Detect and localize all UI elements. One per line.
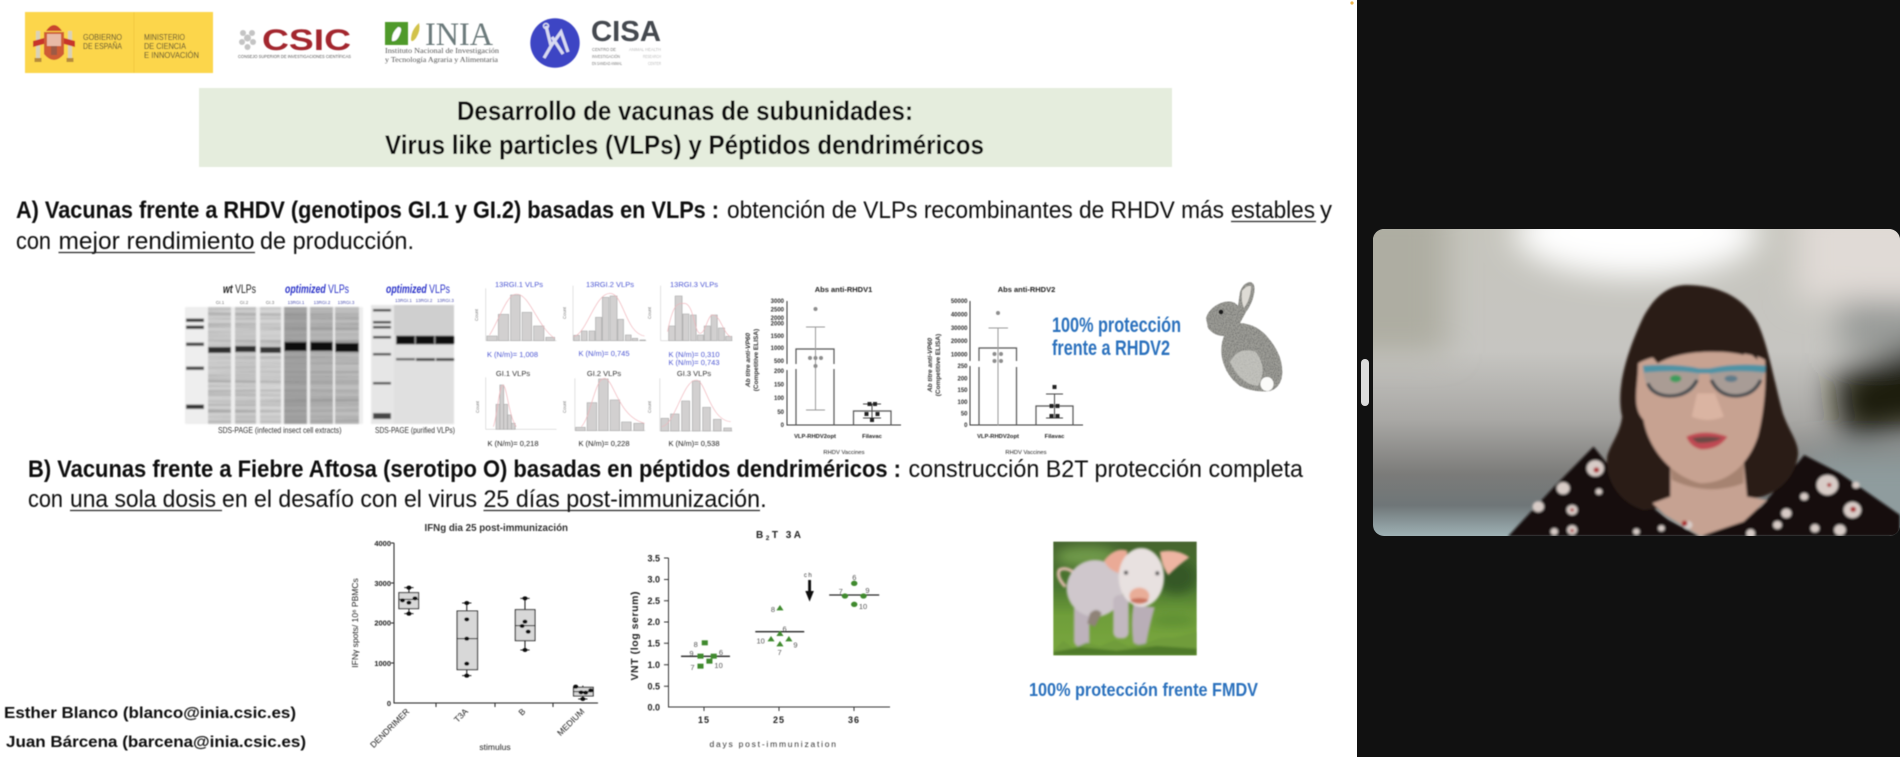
chart: B2T 3A VNT: 6 [783, 624, 787, 634]
chart: B2T 3A VNT: 2.5 [647, 596, 660, 606]
blurred room background [1373, 229, 1900, 536]
chart: B2T 3A VNT: T 3A [772, 530, 801, 541]
figure: SDS-PAGE gels [185, 282, 455, 435]
histogram titles and stiffness values: K (N/m)= 0,538 [668, 439, 720, 448]
figure: SDS-PAGE gels: optimized VLPs [285, 282, 349, 296]
chart: IFNg box plot: stimulus [479, 742, 511, 752]
chart: Abs anti-RHDV2: RHDV Vaccines [1005, 450, 1047, 456]
chart: Abs anti-RHDV2: Filavac [1045, 434, 1065, 440]
box plot marks [399, 586, 593, 701]
chart: IFNg box plot: 4000 [374, 539, 391, 548]
text block A: estables [1231, 197, 1315, 224]
text block A: A) Vacunas frente a RHDV (genotipos GI.1 y GI.2) basadas en VLPs : [16, 197, 719, 224]
logo: CISA: CISA [591, 16, 661, 48]
figure: particle size histograms [474, 280, 733, 448]
text block A: de producción. [260, 228, 414, 255]
histogram titles and stiffness values: GI.1 VLPs [496, 369, 530, 378]
chart: Abs anti-RHDV1: 150 [774, 382, 785, 388]
chart: Abs anti-RHDV2: 100 [957, 400, 968, 406]
chart: IFNg box plot: DENDRIMER [368, 706, 411, 750]
chart: B2T 3A VNT: 10 [714, 661, 723, 670]
histogram titles and stiffness values: 13RGI.2 VLPs [586, 280, 634, 289]
callout: 100% protección frente FMDV: 100% protección frente FMDV [1029, 680, 1258, 700]
authors: Juan Bárcena (barcena@inia.csic.es) [6, 734, 306, 751]
chart: B2T 3A VNT: 7 [690, 663, 695, 672]
text block B: con [28, 486, 63, 513]
logo: INIA [385, 17, 499, 64]
chart: Abs anti-RHDV2: 30000 [951, 326, 968, 332]
logo: Gobierno de España: GOBIERNO [83, 33, 122, 42]
title banner: Desarrollo de vacunas de subunidades: [457, 96, 913, 126]
chart: B2T 3A VNT: 3.0 [647, 574, 660, 584]
histogram titles and stiffness values: 13RGI.3 VLPs [670, 280, 718, 289]
chart: IFNg box plot: 1000 [374, 659, 391, 668]
chart: B2T 3A VNT: 9 [689, 649, 693, 658]
histogram titles and stiffness values: 13RGI.1 VLPs [495, 280, 543, 289]
figure: SDS-PAGE gels: 13RGI.1 [395, 298, 412, 303]
histogram titles and stiffness values: K (N/m)= 0,743 [668, 358, 720, 367]
text block B: B) Vacunas frente a Fiebre Aftosa (serotipo O) basadas en péptidos dendriméricos : [28, 456, 901, 483]
chart: Abs anti-RHDV2: 50 [961, 412, 968, 418]
figure: SDS-PAGE gels: GI.2 [240, 300, 249, 305]
chart: B2T 3A VNT [629, 530, 890, 749]
small notification dot [1350, 1, 1354, 5]
chart: Abs anti-RHDV1: 2000 [771, 316, 785, 322]
figure: SDS-PAGE gels: 13RGI.3 [437, 298, 454, 303]
callout: 100% protección frente a RHDV2 [1052, 314, 1181, 360]
logo: Gobierno de España [25, 12, 213, 73]
text block A: con [16, 228, 51, 255]
chart: IFNg box plot: B [516, 706, 528, 717]
figure: SDS-PAGE gels: SDS-PAGE (infected insect cell extracts) [218, 425, 342, 435]
logo: CSIC: CSIC [262, 24, 351, 57]
histogram titles and stiffness values: Count [647, 400, 652, 413]
chart: IFNg box plot: MEDIUM [555, 706, 586, 738]
chart: IFNg box plot: 3000 [374, 579, 391, 588]
chart: Abs anti-RHDV1: VLP-RHDV2opt [794, 434, 836, 440]
histogram titles and stiffness values: Count [562, 400, 567, 413]
chart: Abs anti-RHDV2: 10000 [951, 352, 968, 358]
chart: Abs anti-RHDV2: 0 [964, 423, 968, 429]
histogram bars and fitted curves [486, 286, 733, 431]
authors: Esther Blanco (blanco@inia.csic.es) [4, 705, 296, 722]
chart: Abs anti-RHDV2: 200 [957, 376, 968, 382]
title banner: Virus like particles (VLPs) y Péptidos dendriméricos [385, 130, 984, 160]
chart: Abs anti-RHDV1 [745, 285, 901, 456]
chart: IFNg box plot: IFNg dia 25 post-immunización [424, 523, 568, 534]
glasses [1643, 370, 1700, 396]
chart: Abs anti-RHDV2: 50000 [951, 299, 968, 305]
histogram titles and stiffness values: Count [562, 306, 567, 319]
figure: SDS-PAGE gels: optimized VLPs [386, 282, 450, 296]
histogram titles and stiffness values: Count [647, 306, 652, 319]
image: piglet [1053, 542, 1197, 655]
gel 1: infected insect cell extracts [185, 307, 363, 424]
logo: CISA: EN SANIDAD ANIMAL [592, 61, 622, 66]
figure: SDS-PAGE gels: 13RGI.1 [288, 300, 305, 305]
gel 2: purified VLPs [371, 305, 454, 424]
logo: CISA [530, 16, 662, 68]
chart: Abs anti-RHDV1: 200 [774, 369, 785, 375]
slide content [4, 12, 1333, 752]
chart: Abs anti-RHDV2: Abs anti-RHDV2 [998, 285, 1055, 294]
text block B: una sola dosis [70, 486, 216, 513]
video panel handle [1361, 359, 1369, 406]
icon: rabbit [1206, 282, 1282, 391]
logo: CSIC: CONSEJO SUPERIOR DE INVESTIGACIONES CIENTÍFICAS [238, 53, 351, 59]
chart: Abs anti-RHDV2 [927, 285, 1083, 456]
text block B: 25 días post-immunización [484, 486, 760, 513]
histogram titles and stiffness values: Count [475, 400, 480, 413]
chart: Abs anti-RHDV1: 50 [777, 410, 785, 416]
chart: B2T 3A VNT: 8 [694, 640, 698, 649]
histogram titles and stiffness values: K (N/m)= 0,745 [578, 349, 630, 358]
chart: B2T 3A VNT: 1.0 [647, 660, 660, 670]
chart: Abs anti-RHDV1: 1500 [771, 334, 785, 340]
text block B [28, 456, 1303, 513]
chart: Abs anti-RHDV2: (Competitive ELISA) [935, 334, 942, 396]
chart: B2T 3A VNT: 25 [773, 715, 785, 725]
chart: B2T 3A VNT: 2.0 [647, 617, 660, 627]
neck and chest [1652, 460, 1767, 536]
callout: 100% protección frente a RHDV2: 100% protección [1052, 314, 1181, 337]
chart: Abs anti-RHDV2: 20000 [951, 339, 968, 345]
chart: B2T 3A VNT: 10 [757, 636, 765, 646]
chart: Abs anti-RHDV1: RHDV Vaccines [823, 450, 865, 456]
chart: Abs anti-RHDV1: (Competitive ELISA) [753, 329, 760, 391]
figure: SDS-PAGE gels: 13RGI.3 [338, 300, 355, 305]
logo: INIA: y Tecnología Agraria y Alimentaria [385, 55, 499, 64]
chart: Abs anti-RHDV1: Abs anti-RHDV1 [815, 285, 872, 294]
figure: SDS-PAGE gels: wt VLPs [223, 282, 256, 296]
histogram titles and stiffness values: K (N/m)= 0,310 [668, 350, 720, 359]
chart: B2T 3A VNT: 36 [848, 715, 860, 725]
title banner [199, 88, 1172, 167]
chart: Abs anti-RHDV2: 150 [957, 388, 968, 394]
chart: Abs anti-RHDV1: 1000 [771, 346, 785, 352]
text block A [16, 197, 1333, 255]
histogram titles and stiffness values [474, 280, 720, 448]
blouse flowers [1532, 460, 1861, 537]
chart: Abs anti-RHDV1: 3000 [771, 299, 785, 305]
chart: B2T 3A VNT: 9 [865, 586, 870, 595]
logo: Gobierno de España: MINISTERIO [144, 33, 185, 42]
chart: B2T 3A VNT: 1.5 [647, 638, 660, 648]
hair [1607, 285, 1798, 510]
chart: Abs anti-RHDV2: VLP-RHDV2opt [977, 434, 1019, 440]
authors [4, 705, 306, 751]
chart: B2T 3A VNT: 3.5 [647, 554, 660, 564]
chart: B2T 3A VNT: 9 [793, 640, 797, 650]
chart: B2T 3A VNT: B [756, 530, 763, 541]
chart: Abs anti-RHDV2: 250 [957, 364, 968, 370]
chart: B2T 3A VNT: 6 [719, 648, 723, 657]
logo: CISA: CENTRO DE [592, 47, 616, 52]
chart: Abs anti-RHDV1: 2000 [771, 322, 785, 328]
chart: B2T 3A VNT: 7 [839, 587, 843, 596]
logo: CSIC [238, 24, 351, 59]
chart: Abs anti-RHDV1: 100 [774, 396, 785, 402]
logo: INIA: Instituto Nacional de Investigación [385, 46, 499, 55]
histogram titles and stiffness values: K (N/m)= 1,008 [487, 350, 538, 359]
logo: CISA: CENTER [648, 61, 662, 66]
panel: speaker video [1373, 229, 1900, 536]
chart: Abs anti-RHDV1: 0 [781, 423, 785, 429]
chart: IFNg box plot: 0 [387, 699, 391, 708]
chart: B2T 3A VNT: 15 [698, 715, 710, 725]
chart: B2T 3A VNT: VNT (log serum) [629, 592, 641, 680]
figure: SDS-PAGE gels: GI.3 [266, 300, 275, 305]
chart: B2T 3A VNT: 0.5 [647, 682, 660, 692]
logo: Gobierno de España: E INNOVACIÓN [144, 51, 199, 60]
chart: B2T 3A VNT: 7 [778, 648, 782, 657]
chart: Abs anti-RHDV2: 40000 [951, 312, 968, 318]
chart: B2T 3A VNT: 8 [771, 605, 775, 614]
logo: Gobierno de España: DE ESPAÑA [83, 42, 123, 51]
chart: Abs anti-RHDV1: 500 [774, 359, 785, 365]
chart: Abs anti-RHDV2: Ab titre anti-VP60 [927, 338, 934, 393]
chart: B2T 3A VNT: 0.0 [647, 702, 660, 712]
text block A: y [1320, 197, 1333, 224]
text block B: en el desafío con el virus [222, 486, 477, 513]
histogram titles and stiffness values: GI.3 VLPs [677, 369, 711, 378]
mean lines and data points [681, 580, 879, 669]
logo: INIA: INIA [425, 17, 493, 53]
presentation slide background [0, 0, 1357, 757]
chart: B2T 3A VNT: 10 [859, 602, 867, 611]
figure: SDS-PAGE gels: GI.1 [216, 300, 225, 305]
callout: 100% protección frente a RHDV2: frente a RHDV2 [1052, 337, 1170, 360]
logo: CISA: INVESTIGACIÓN [592, 53, 620, 59]
chart: B2T 3A VNT: 2 [766, 535, 770, 542]
figure: SDS-PAGE gels: SDS-PAGE (purified VLPs) [375, 425, 455, 435]
chart: B2T 3A VNT: days post-immunization [710, 739, 836, 749]
nose and shading [1692, 393, 1724, 420]
speaker [1508, 285, 1900, 537]
logo: CISA: RESEARCH [643, 54, 661, 59]
chart: IFNg box plot: IFNγ spots/ 10⁶ PBMCs [350, 578, 360, 668]
histogram titles and stiffness values: K (N/m)= 0,218 [487, 439, 539, 448]
text block B: construcción B2T protección completa [908, 456, 1303, 483]
chart: IFNg box plot: 2000 [374, 618, 391, 628]
text block B: . [760, 486, 767, 513]
face [1636, 352, 1765, 483]
chart: Abs anti-RHDV1: Filavac [862, 434, 883, 440]
text block A: obtención de VLPs recombinantes de RHDV más [727, 197, 1224, 224]
chart: B2T 3A VNT: ch [804, 573, 813, 579]
chart: IFNg box plot: T3A [452, 706, 470, 724]
chart: IFNg box plot [350, 523, 598, 752]
logo: Gobierno de España: DE CIENCIA [144, 42, 187, 51]
figure: SDS-PAGE gels: 13RGI.2 [314, 300, 331, 305]
figure: SDS-PAGE gels: 13RGI.2 [416, 298, 433, 303]
chart: Abs anti-RHDV1: Ab titre anti-VP60 [745, 333, 752, 388]
mouth [1686, 432, 1727, 449]
histogram titles and stiffness values: GI.2 VLPs [587, 369, 621, 378]
histogram titles and stiffness values: Count [474, 308, 479, 321]
chart: Abs anti-RHDV1: 2500 [771, 308, 785, 314]
histogram titles and stiffness values: K (N/m)= 0,228 [578, 439, 630, 448]
text block A: mejor rendimiento [58, 228, 254, 255]
chart: B2T 3A VNT: 6 [852, 573, 856, 582]
blouse [1508, 447, 1900, 537]
logo: CISA: ANIMAL HEALTH [629, 47, 661, 52]
